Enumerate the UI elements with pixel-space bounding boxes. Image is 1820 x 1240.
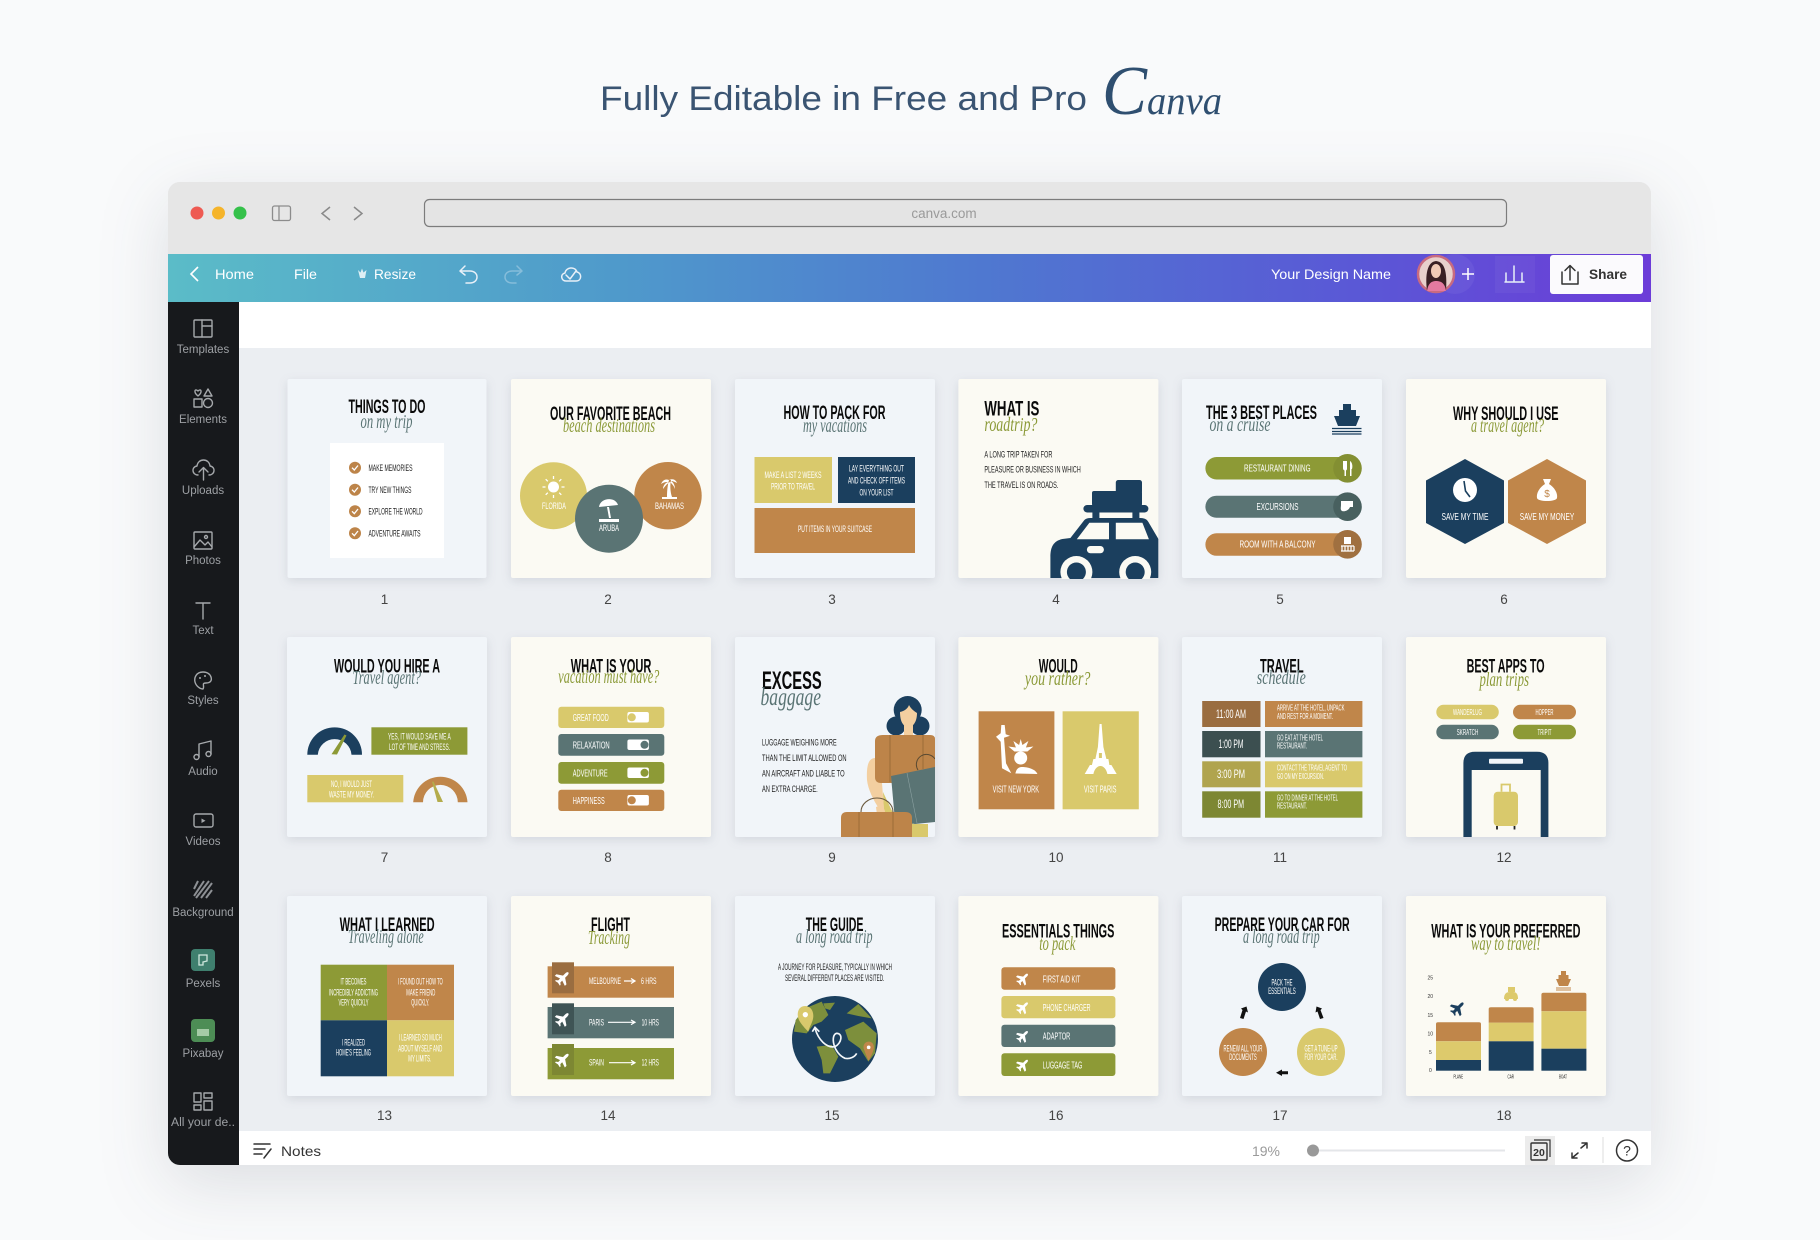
app pills: SKRATCH bbox=[1457, 728, 1478, 737]
bottom notes bar: Notes bbox=[281, 1143, 321, 1159]
icon: videos bbox=[186, 814, 221, 848]
title: roadtrip? bbox=[984, 414, 1037, 436]
card 2: beach destinations bbox=[511, 379, 711, 578]
item: first aid kit bbox=[1001, 967, 1115, 990]
bar: boat bbox=[1541, 993, 1586, 1080]
card 3: how to pack bbox=[735, 379, 935, 578]
icon: background bbox=[172, 881, 234, 919]
page number 11: 11 bbox=[1273, 850, 1287, 865]
box: lay everything out: AND CHECK OFF ITEMS bbox=[848, 476, 905, 486]
stacked bar chart bbox=[1428, 971, 1586, 1080]
title: Traveling alone bbox=[348, 926, 424, 948]
browser window bbox=[168, 182, 1651, 1165]
title bbox=[340, 915, 435, 948]
title: EXCESS bbox=[762, 667, 822, 695]
pill: room with a balcony bbox=[1205, 530, 1362, 559]
gauge: navy bbox=[307, 727, 362, 755]
title: HOW TO PACK FOR bbox=[784, 403, 886, 424]
page number 5: 5 bbox=[1276, 592, 1284, 607]
step: get a tune-up: FOR YOUR CAR. bbox=[1304, 1052, 1338, 1062]
box: lay everything out: ON YOUR LIST bbox=[860, 488, 894, 498]
page number 14: 14 bbox=[600, 1108, 616, 1123]
title: on a cruise bbox=[1210, 414, 1271, 436]
title: BEST APPS TO bbox=[1467, 656, 1545, 677]
quadrant: addicting: INCREDIBLY ADDICTING bbox=[329, 987, 378, 997]
card 8: vacation must have bbox=[511, 637, 711, 837]
title: WHY SHOULD I USE bbox=[1453, 404, 1558, 425]
body text: THE TRAVEL IS ON ROADS. bbox=[984, 480, 1058, 490]
icon: ship bbox=[1332, 404, 1362, 434]
illustration: car with luggage bbox=[1050, 480, 1158, 588]
quadrant: addicting: IT BECOMES bbox=[340, 977, 366, 987]
title: WHAT IS YOUR bbox=[571, 656, 652, 677]
heading: Fully Editable in Free and Pro Canva bbox=[600, 53, 1222, 130]
page number 12: 12 bbox=[1496, 850, 1512, 865]
step: pack the essentials bbox=[1258, 963, 1306, 1011]
title: THE 3 BEST PLACES bbox=[1206, 403, 1317, 424]
card 11: travel schedule bbox=[1182, 637, 1382, 837]
card 10: would you rather bbox=[958, 637, 1158, 837]
route: spain: SPAIN bbox=[589, 1058, 604, 1068]
toggle: great food: GREAT FOOD bbox=[573, 713, 609, 724]
pill: excursions bbox=[1205, 492, 1362, 521]
route: spain: 12 HRS bbox=[642, 1058, 659, 1068]
toggle: relaxation bbox=[558, 734, 664, 756]
arrow: to renew documents bbox=[1240, 1006, 1248, 1019]
icon: text bbox=[192, 603, 214, 637]
item: phone charger: PHONE CHARGER bbox=[1043, 1003, 1091, 1014]
app pills: WANDERLUG bbox=[1453, 708, 1482, 717]
page number 1: 1 bbox=[381, 592, 388, 607]
title: beach destinations bbox=[563, 415, 655, 437]
title bbox=[550, 404, 671, 437]
bar: car: CAR bbox=[1508, 1074, 1514, 1080]
title bbox=[1431, 922, 1580, 955]
body text bbox=[762, 738, 847, 794]
title: Tracking bbox=[588, 927, 630, 949]
step: get a tune-up bbox=[1297, 1028, 1345, 1076]
title: ESSENTIALS THINGS bbox=[1002, 922, 1114, 943]
icon: statue of liberty bbox=[996, 725, 1037, 774]
step: renew documents: DOCUMENTS bbox=[1229, 1052, 1257, 1062]
title: you rather? bbox=[1024, 668, 1090, 690]
option: paris bbox=[1063, 711, 1139, 809]
item: luggage tag bbox=[1001, 1053, 1115, 1076]
toggle: adventure: ADVENTURE bbox=[573, 768, 608, 780]
y axis labels: 20 bbox=[1428, 994, 1433, 1000]
row: 3:00 pm bbox=[1202, 761, 1362, 787]
title: WOULD bbox=[1039, 656, 1078, 677]
browser title bar bbox=[190, 198, 1508, 228]
arrow: from pack the essentials bbox=[1316, 1006, 1324, 1019]
title: way to travel! bbox=[1471, 933, 1540, 955]
quadrant: addicting bbox=[321, 965, 387, 1020]
title: my vacations bbox=[803, 415, 867, 437]
title bbox=[588, 915, 630, 949]
toggle: great food bbox=[558, 707, 664, 728]
row: 1:00 pm: 1:00 PM bbox=[1218, 737, 1244, 751]
quadrant: make friends: MAKE FRIEND bbox=[406, 987, 435, 997]
quadrant: home's feeling: I REALIZED bbox=[342, 1038, 365, 1048]
box: make a list: PRIOR TO TRAVEL bbox=[771, 482, 815, 492]
bottom notes bar bbox=[239, 1131, 1651, 1165]
icon: pixabay: Pixabay bbox=[183, 1048, 224, 1060]
page number 16: 16 bbox=[1048, 1108, 1064, 1123]
title bbox=[1024, 656, 1090, 690]
title bbox=[784, 403, 886, 437]
toggle: happiness bbox=[558, 790, 664, 811]
quadrant: home's feeling: HOME'S FEELING bbox=[336, 1048, 371, 1058]
body text: PLEASURE OR BUSINESS IN WHICH bbox=[984, 464, 1081, 474]
body text: AN EXTRA CHARGE. bbox=[762, 784, 818, 794]
title: on my trip bbox=[360, 411, 412, 433]
circle: bahamas: BAHAMAS bbox=[655, 501, 684, 511]
box: lay everything out bbox=[838, 457, 915, 503]
card 7: hire a travel agent bbox=[287, 637, 487, 837]
box: no: WASTE MY MONEY. bbox=[329, 789, 374, 799]
icon: photos: Photos bbox=[185, 555, 221, 567]
row: 3:00 pm: CONTACT THE TRAVEL AGENT TO bbox=[1277, 762, 1347, 772]
toggle: happiness: HAPPINESS bbox=[573, 796, 605, 807]
share button bbox=[1550, 255, 1643, 294]
page number 6: 6 bbox=[1500, 592, 1508, 607]
quadrant: make friends bbox=[387, 965, 454, 1020]
box: lay everything out: LAY EVERYTHING OUT bbox=[849, 463, 904, 473]
title: Travel agent? bbox=[352, 667, 421, 689]
checklist panel: MAKE MEMORIES bbox=[368, 463, 412, 473]
circle: florida bbox=[520, 462, 587, 529]
row: 1:00 pm bbox=[1202, 731, 1362, 757]
body text: A JOURNEY FOR PLEASURE, TYPICALLY IN WHICH bbox=[778, 962, 892, 972]
avatar bbox=[1418, 256, 1454, 292]
body text bbox=[778, 962, 892, 983]
body text: AN AIRCRAFT AND LIABLE TO bbox=[762, 768, 845, 778]
title: a travel agent? bbox=[1471, 415, 1544, 437]
option: paris: VISIT PARIS bbox=[1084, 783, 1117, 795]
row: 11:00 am: AND REST FOR A MOMENT. bbox=[1277, 711, 1333, 721]
quadrant: my limits: I LEARNED SO MUCH bbox=[399, 1032, 442, 1042]
card 4: what is road trip bbox=[958, 379, 1158, 588]
title: a long road trip bbox=[1243, 926, 1320, 948]
canva toolbar: Resize bbox=[374, 266, 416, 282]
row: 8:00 pm: GO TO DINNER AT THE HOTEL bbox=[1277, 792, 1338, 802]
circle: aruba bbox=[575, 485, 643, 553]
item: luggage tag: LUGGAGE TAG bbox=[1043, 1060, 1082, 1071]
quadrant: my limits: ABOUT MYSELF AND bbox=[398, 1043, 442, 1053]
white ruler strip bbox=[239, 302, 1651, 348]
title bbox=[1206, 403, 1317, 436]
icon: pixabay bbox=[183, 1019, 224, 1060]
row: 8:00 pm: RESTAURANT. bbox=[1277, 801, 1307, 811]
title: WHAT I LEARNED bbox=[340, 915, 435, 936]
card 17: prepare your car bbox=[1182, 896, 1382, 1096]
row: 8:00 pm bbox=[1202, 791, 1362, 818]
app pills: HOPPER bbox=[1536, 708, 1554, 717]
item: phone charger bbox=[1001, 996, 1115, 1018]
card 15: the guide bbox=[735, 896, 935, 1096]
body text: A LONG TRIP TAKEN FOR bbox=[984, 450, 1053, 460]
canva toolbar: File bbox=[294, 266, 317, 282]
title bbox=[558, 656, 659, 688]
row: 8:00 pm: 8:00 PM bbox=[1218, 797, 1244, 811]
bar: plane: PLANE bbox=[1454, 1074, 1463, 1080]
title: schedule bbox=[1257, 667, 1306, 689]
page number 9: 9 bbox=[828, 850, 836, 865]
illustration: globe with pins bbox=[792, 996, 878, 1082]
body text: THAN THE LIMIT ALLOWED ON bbox=[762, 753, 847, 763]
quadrant: my limits bbox=[387, 1020, 454, 1076]
title: FLIGHT bbox=[591, 915, 630, 936]
icon: pexels: Pexels bbox=[186, 978, 221, 990]
hexagon: save my time: SAVE MY TIME bbox=[1442, 511, 1488, 523]
hexagon: save my money bbox=[1508, 459, 1586, 544]
page number 3: 3 bbox=[828, 592, 836, 607]
page number 17: 17 bbox=[1272, 1108, 1288, 1123]
title bbox=[796, 915, 872, 948]
step: pack the essentials: ESSENTIALS bbox=[1268, 986, 1296, 996]
title: PREPARE YOUR CAR FOR bbox=[1215, 915, 1350, 936]
row: 3:00 pm: 3:00 PM bbox=[1217, 767, 1245, 781]
card 5: three best places bbox=[1182, 379, 1382, 578]
left sidebar bbox=[168, 302, 239, 1165]
y axis labels: 15 bbox=[1428, 1013, 1433, 1019]
icon: templates: Templates bbox=[177, 344, 229, 356]
icon: plane bbox=[1447, 998, 1468, 1019]
card 6: why travel agent bbox=[1406, 379, 1606, 578]
icon: all your designs: All your de.. bbox=[171, 1117, 235, 1129]
title bbox=[984, 398, 1039, 436]
route: paris: PARIS bbox=[589, 1017, 604, 1027]
checklist panel bbox=[330, 443, 444, 558]
bottom notes bar: ? bbox=[1623, 1142, 1631, 1158]
title bbox=[334, 656, 440, 689]
title: OUR FAVORITE BEACH bbox=[550, 404, 671, 425]
y axis labels: 10 bbox=[1428, 1032, 1433, 1038]
arrow: to get a tune-up bbox=[1276, 1070, 1288, 1076]
quadrant: my limits: MY LIMITS. bbox=[408, 1053, 431, 1063]
icon: background: Background bbox=[172, 907, 234, 919]
pill: room with a balcony: ROOM WITH A BALCONY bbox=[1240, 540, 1316, 551]
toggle: adventure bbox=[558, 762, 664, 784]
card 14: flight tracking bbox=[511, 896, 711, 1096]
title: vacation must have? bbox=[558, 666, 659, 688]
title bbox=[1453, 404, 1558, 437]
app pills: TRIPIT bbox=[1538, 728, 1552, 737]
card 16: essentials bbox=[958, 896, 1158, 1096]
box: put items in suitcase bbox=[754, 508, 915, 553]
page number 15: 15 bbox=[824, 1108, 840, 1123]
box: yes bbox=[371, 727, 467, 755]
quadrant: make friends: QUICKLY. bbox=[411, 998, 429, 1008]
icon: pexels bbox=[186, 949, 220, 987]
title: THINGS TO DO bbox=[348, 397, 426, 418]
title: plan trips bbox=[1478, 669, 1529, 691]
box: make a list bbox=[754, 457, 832, 503]
icon: audio: Audio bbox=[188, 766, 218, 778]
page number 13: 13 bbox=[377, 1108, 392, 1123]
route: paris: 10 HRS bbox=[642, 1017, 659, 1027]
icon: elements: Elements bbox=[179, 414, 227, 426]
icon: uploads bbox=[182, 460, 224, 497]
box: yes: YES, IT WOULD SAVE ME A bbox=[388, 732, 451, 742]
title bbox=[1002, 922, 1114, 955]
bottom notes bar: 20 bbox=[1533, 1147, 1545, 1159]
bar: car bbox=[1489, 1007, 1534, 1080]
icon: templates bbox=[177, 320, 229, 356]
title bbox=[1257, 656, 1306, 689]
route: spain bbox=[548, 1044, 674, 1079]
page number 4: 4 bbox=[1052, 592, 1060, 607]
route: melbourne: 6 HRS bbox=[641, 976, 656, 986]
circle: bahamas bbox=[634, 462, 702, 529]
browser title bar: canva.com bbox=[911, 206, 977, 221]
title: baggage bbox=[760, 684, 821, 711]
body text: SEVERAL DIFFERENT PLACES ARE VISITED. bbox=[785, 973, 884, 983]
hexagon: save my money: SAVE MY MONEY bbox=[1520, 511, 1574, 523]
title bbox=[760, 667, 822, 711]
title bbox=[348, 397, 426, 433]
title: WOULD YOU HIRE A bbox=[334, 656, 440, 677]
icon: text: Text bbox=[192, 625, 214, 637]
hexagon: save my time bbox=[1426, 459, 1504, 544]
row: 11:00 am: 11:00 AM bbox=[1216, 707, 1246, 721]
box: yes: LOT OF TIME AND STRESS. bbox=[389, 742, 450, 752]
circle: aruba: ARUBA bbox=[599, 523, 620, 533]
quadrant: home's feeling bbox=[321, 1020, 387, 1076]
step: renew documents: RENEW ALL YOUR bbox=[1224, 1044, 1263, 1054]
y axis labels: 5 bbox=[1429, 1050, 1432, 1056]
icon: audio bbox=[188, 741, 218, 778]
icon: ship bbox=[1556, 971, 1571, 990]
row: 1:00 pm: RESTAURANT. bbox=[1277, 741, 1307, 751]
icon: photos bbox=[185, 532, 221, 567]
share button: Share bbox=[1589, 266, 1627, 282]
heading: Fully Editable in Free and Pro Canva: Canva bbox=[1102, 53, 1222, 130]
checklist panel: ADVENTURE AWAITS bbox=[368, 529, 420, 539]
page number 7: 7 bbox=[381, 850, 388, 865]
circle: florida: FLORIDA bbox=[542, 501, 567, 511]
title: a long road trip bbox=[796, 926, 872, 948]
row: 1:00 pm: GO EAT AT THE HOTEL bbox=[1277, 732, 1323, 742]
option: new york: VISIT NEW YORK bbox=[993, 783, 1039, 795]
box: make a list: MAKE A LIST 2 WEEKS bbox=[764, 470, 822, 480]
y axis labels: 0 bbox=[1429, 1068, 1432, 1074]
illustration: woman with luggage bbox=[841, 696, 935, 837]
illustration: phone with suitcase bbox=[1463, 752, 1548, 837]
bottom notes bar: 19% bbox=[1252, 1143, 1280, 1159]
canva toolbar: Home bbox=[215, 266, 254, 282]
pill: restaurant dining bbox=[1205, 454, 1362, 483]
checklist panel: TRY NEW THINGS bbox=[368, 485, 412, 495]
pill: excursions: EXCURSIONS bbox=[1256, 502, 1299, 513]
row: 11:00 am: ARRIVE AT THE HOTEL, UNPACK bbox=[1277, 702, 1345, 712]
gauge: orange bbox=[413, 777, 468, 802]
title bbox=[1467, 656, 1545, 691]
route: melbourne: MELBOURNE bbox=[589, 976, 621, 986]
page number 8: 8 bbox=[604, 850, 612, 865]
title: WHAT IS bbox=[984, 398, 1039, 421]
route: melbourne bbox=[548, 962, 674, 998]
step: get a tune-up: GET A TUNE-UP bbox=[1304, 1044, 1338, 1054]
card 18: preferred way to travel bbox=[1406, 896, 1606, 1096]
card 12: best apps bbox=[1406, 637, 1606, 837]
icon: styles bbox=[187, 672, 219, 707]
title: TRAVEL bbox=[1260, 656, 1304, 677]
card 9: excess baggage bbox=[735, 637, 935, 837]
toggle: relaxation: RELAXATION bbox=[573, 740, 610, 752]
icon: elements bbox=[179, 389, 227, 426]
card 13: what i learned bbox=[287, 896, 487, 1096]
page number 18: 18 bbox=[1496, 1108, 1512, 1123]
box: put items in suitcase: PUT ITEMS IN YOUR SUITCASE bbox=[798, 524, 872, 534]
canvas area bbox=[239, 348, 1651, 1131]
heading: Fully Editable in Free and Pro Canva: Fully Editable in Free and Pro bbox=[600, 80, 1087, 118]
app pills bbox=[1436, 705, 1576, 739]
canva toolbar bbox=[168, 254, 1651, 302]
option: new york bbox=[979, 711, 1054, 809]
page number 2: 2 bbox=[604, 592, 612, 607]
route: paris bbox=[548, 1003, 674, 1038]
y axis labels: 25 bbox=[1428, 976, 1433, 982]
step: pack the essentials: PACK THE bbox=[1272, 978, 1292, 988]
bar: plane bbox=[1436, 1022, 1481, 1080]
hexagon: save my money: $ bbox=[1544, 489, 1550, 500]
body text: LUGGAGE WEIGHING MORE bbox=[762, 738, 837, 748]
quadrant: make friends: I FOUND OUT HOW TO bbox=[398, 977, 443, 987]
title: THE GUIDE bbox=[806, 915, 864, 936]
title bbox=[1215, 915, 1350, 948]
title: WHAT IS YOUR PREFERRED bbox=[1431, 922, 1580, 943]
row: 3:00 pm: GO ON MY EXCURSION. bbox=[1277, 771, 1324, 781]
card 1: things to do bbox=[288, 379, 486, 578]
icon: eiffel tower bbox=[1085, 724, 1117, 774]
body text bbox=[984, 450, 1081, 490]
bar: boat: BOAT bbox=[1559, 1074, 1567, 1080]
item: adaptor: ADAPTOR bbox=[1043, 1032, 1070, 1043]
step: renew documents bbox=[1219, 1028, 1267, 1076]
title: to pack bbox=[1039, 933, 1076, 955]
icon: videos: Videos bbox=[186, 836, 221, 848]
box: no: NO, I WOULD JUST bbox=[331, 779, 372, 789]
icon: car bbox=[1504, 987, 1518, 1001]
pill: restaurant dining: RESTAURANT DINING bbox=[1244, 464, 1311, 474]
box: no bbox=[307, 775, 403, 802]
item: first aid kit: FIRST AID KIT bbox=[1043, 974, 1080, 985]
y axis labels bbox=[1428, 976, 1433, 1074]
page number 10: 10 bbox=[1048, 850, 1064, 865]
row: 11:00 am bbox=[1202, 701, 1362, 727]
quadrant: addicting: VERY QUICKLY bbox=[338, 998, 368, 1008]
checklist panel: EXPLORE THE WORLD bbox=[368, 507, 423, 517]
canva toolbar: Your Design Name bbox=[1271, 266, 1391, 282]
icon: all your designs bbox=[171, 1093, 235, 1129]
icon: uploads: Uploads bbox=[182, 485, 224, 497]
item: adaptor bbox=[1001, 1025, 1115, 1047]
icon: styles: Styles bbox=[187, 695, 219, 707]
